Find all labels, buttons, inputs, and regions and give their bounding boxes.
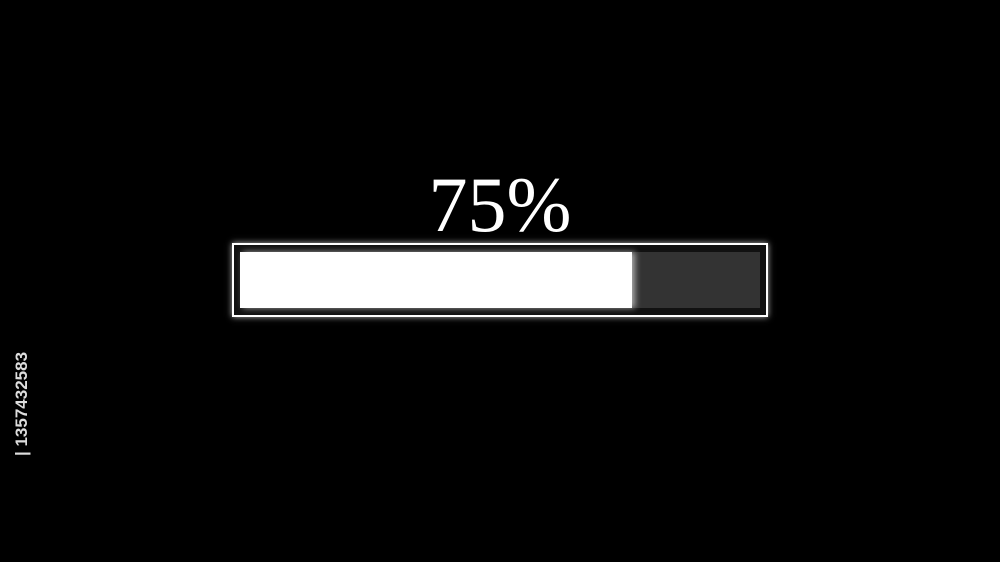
bar fill 75% (240, 252, 632, 308)
bar track (remaining) (240, 252, 760, 308)
progress bar (232, 243, 768, 317)
side id text: | 1357432583 (12, 352, 31, 456)
title: percentage: 75% (428, 161, 571, 248)
